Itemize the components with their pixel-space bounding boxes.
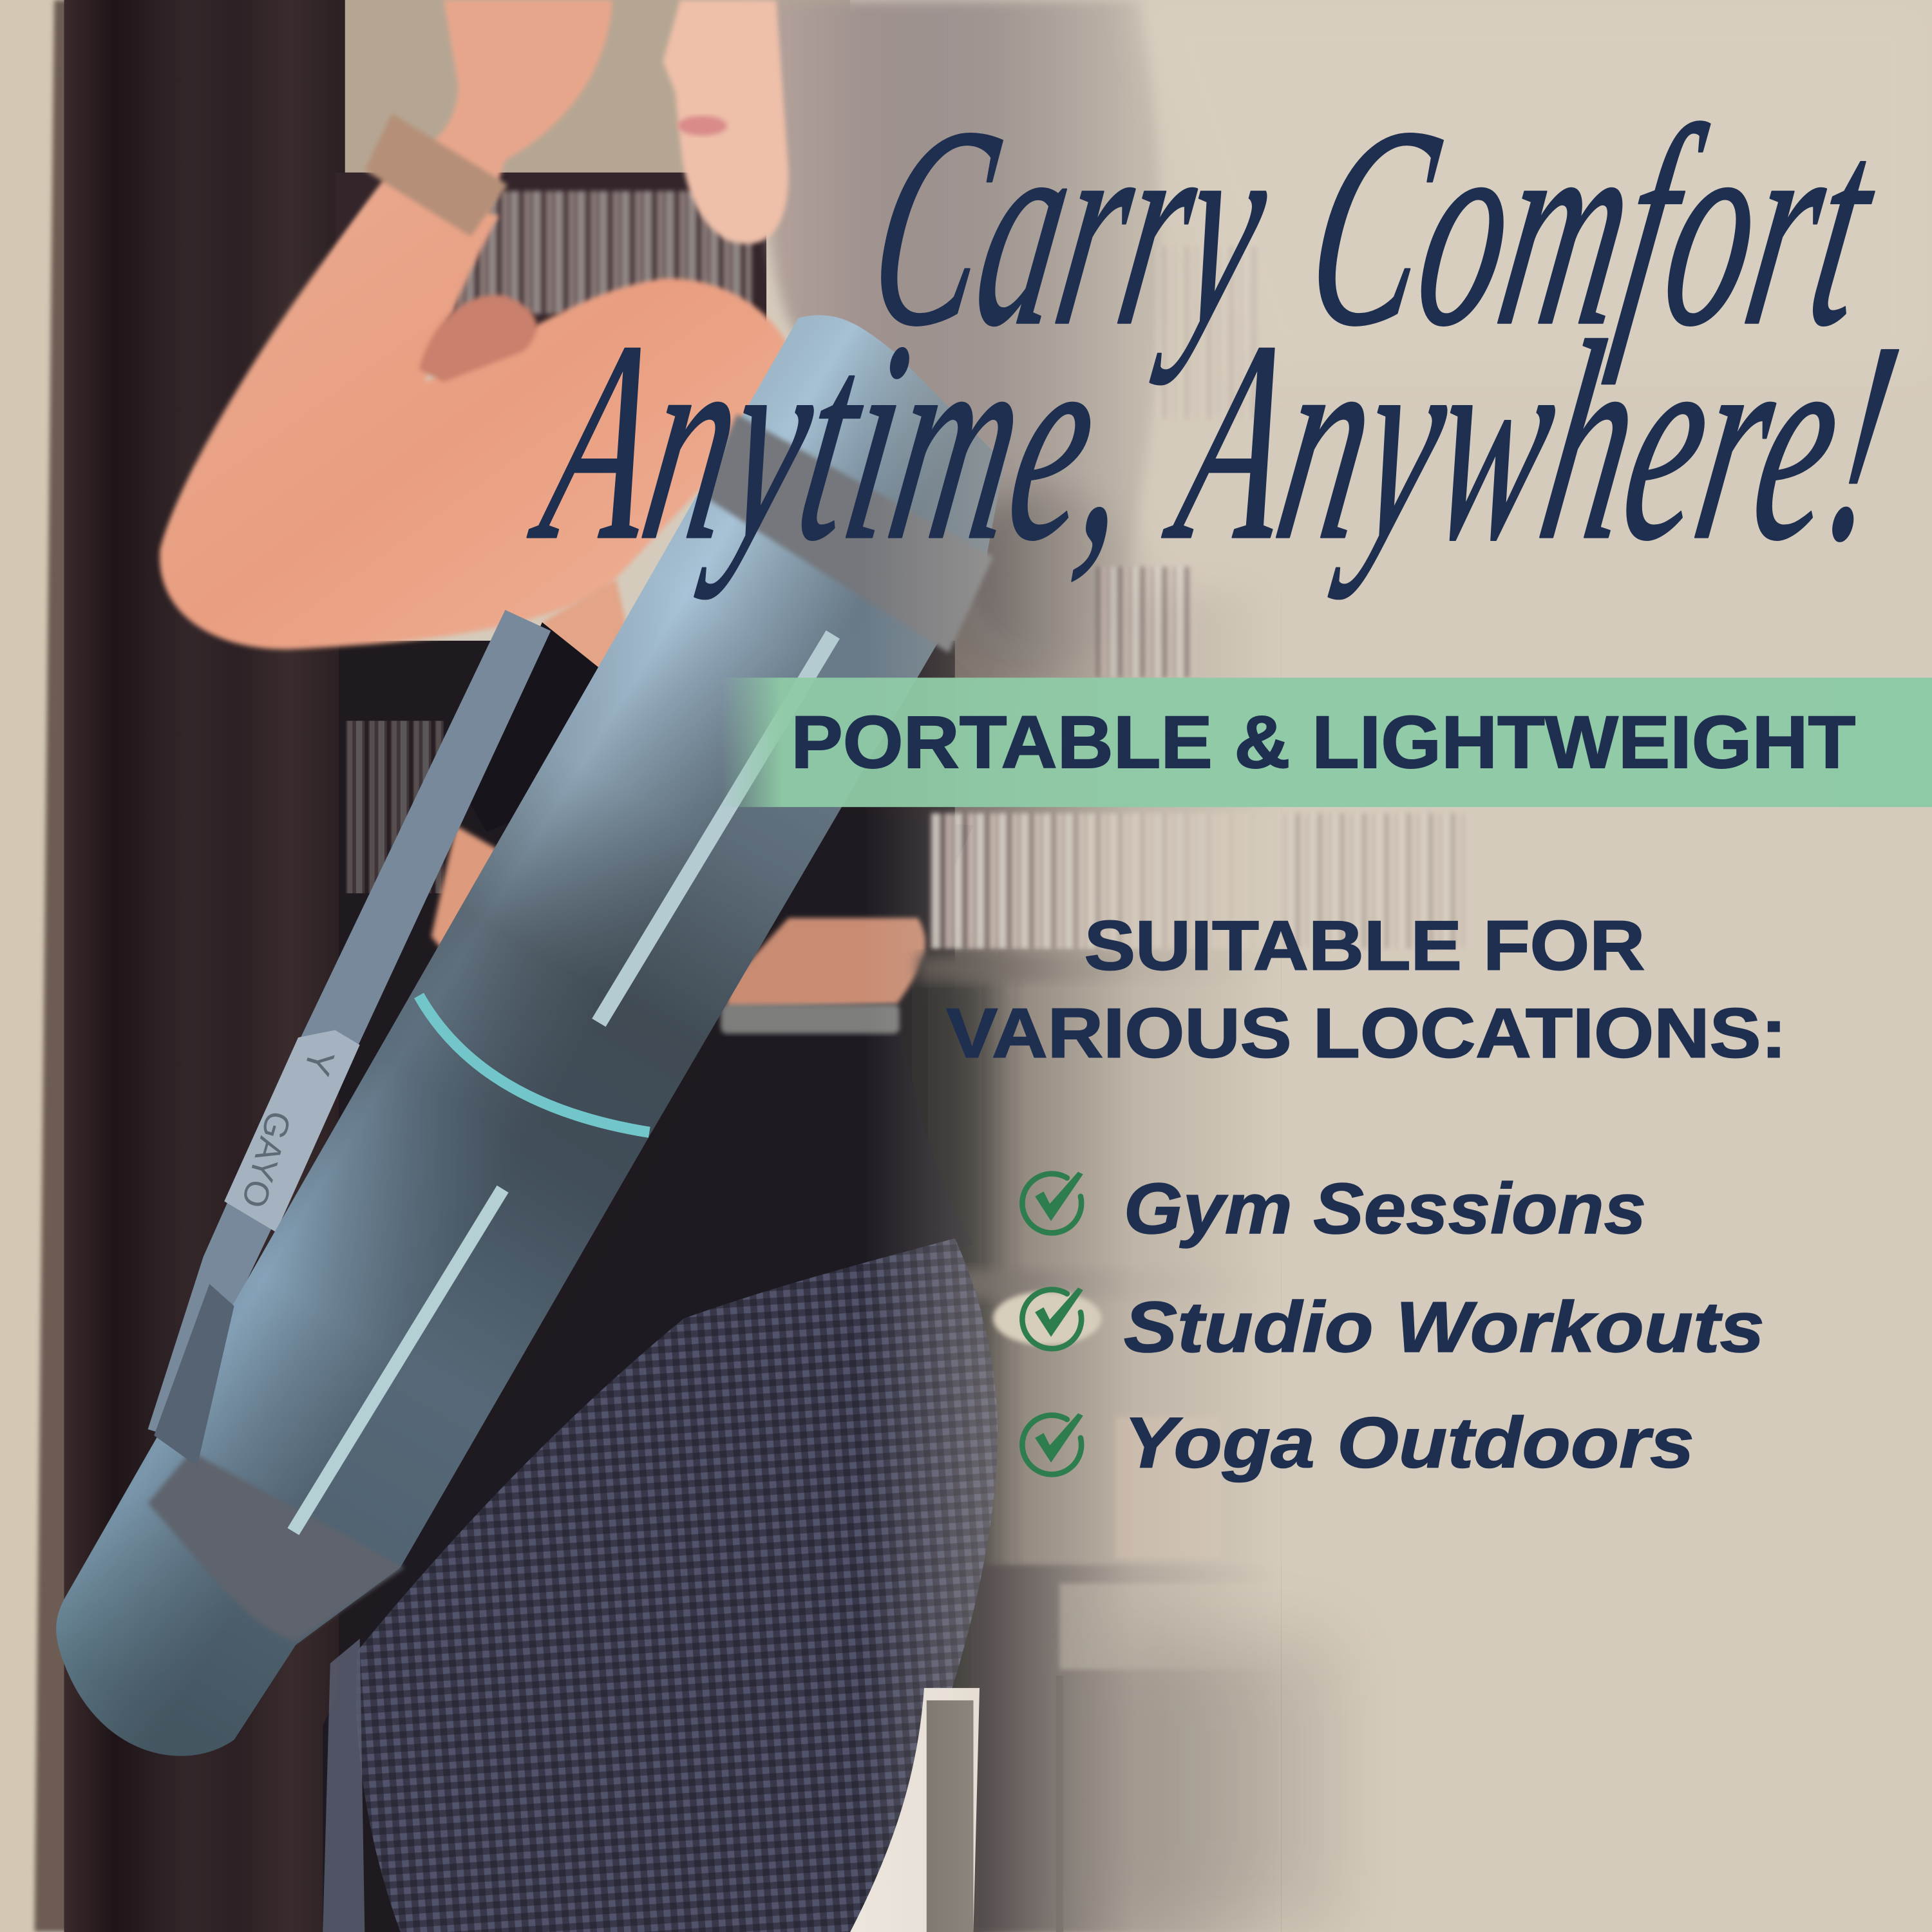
strap label logo: Y — [296, 1045, 342, 1080]
shelves and amplifier — [918, 955, 1282, 1932]
white mat line lower — [293, 1189, 503, 1531]
faint CD rows on the right — [1152, 247, 1257, 419]
icon: green check — [1022, 1287, 1083, 1349]
right-side fade — [862, 0, 1282, 1932]
white mat line upper — [599, 634, 833, 1023]
heading line 1: SUITABLE FOR — [1084, 907, 1645, 985]
rolled yoga mat — [56, 315, 1004, 1756]
strap label text: GAYO — [234, 1107, 298, 1212]
soft top-right glow — [1133, 0, 1932, 370]
white guitar — [850, 1688, 980, 1932]
room backdrop behind the fade — [862, 591, 1282, 1932]
face — [663, 0, 788, 244]
hair — [739, 0, 1160, 650]
bare midriff — [727, 918, 925, 1010]
dark shelf soft edge — [912, 961, 998, 1932]
teal mat ring — [419, 996, 649, 1132]
label: Gym Sessions — [1124, 1169, 1646, 1249]
title: Carry Comfort Anytime, Anywhere! — [515, 68, 1918, 600]
shadow under the hair — [955, 487, 1140, 672]
heading: suitable for various locations — [946, 907, 1786, 1073]
checklist of locations — [1022, 1169, 1765, 1483]
top mat band — [703, 414, 993, 653]
faint amplifier ghost under the fade — [1109, 1639, 1331, 1932]
green banner: portable and lightweight — [721, 677, 1932, 807]
forearm, hand and upper arm — [160, 0, 801, 690]
label: Yoga Outdoors — [1124, 1403, 1694, 1483]
heading line 2: VARIOUS LOCATIONS: — [946, 994, 1786, 1073]
dark CD shelf behind the shoulder — [335, 173, 766, 893]
item: gym sessions — [1022, 1169, 1646, 1249]
yoga mat strap — [148, 610, 551, 1444]
wall behind the woman — [333, 0, 850, 197]
high-waist leggings — [323, 1004, 998, 1932]
item: studio workouts — [1022, 1287, 1765, 1367]
title line 2 word 1: Anytime, — [515, 282, 1160, 600]
label: Studio Workouts — [1124, 1287, 1765, 1367]
black sports top — [431, 622, 973, 973]
title line 1 word 1: Carry — [851, 68, 1291, 385]
curtain at the left edge — [0, 0, 345, 1932]
icon: green check — [1022, 1172, 1083, 1233]
bottom mat band — [148, 1452, 404, 1641]
item: yoga outdoors — [1022, 1403, 1694, 1483]
lips — [677, 116, 727, 135]
wrist watch — [365, 113, 507, 236]
icon: green check — [1022, 1414, 1083, 1474]
CD shelf on the right — [931, 813, 1472, 949]
banner text: PORTABLE & LIGHTWEIGHT — [791, 701, 1855, 784]
dark shelf behind the lower body — [339, 641, 955, 1932]
strap buckle — [154, 1284, 234, 1466]
